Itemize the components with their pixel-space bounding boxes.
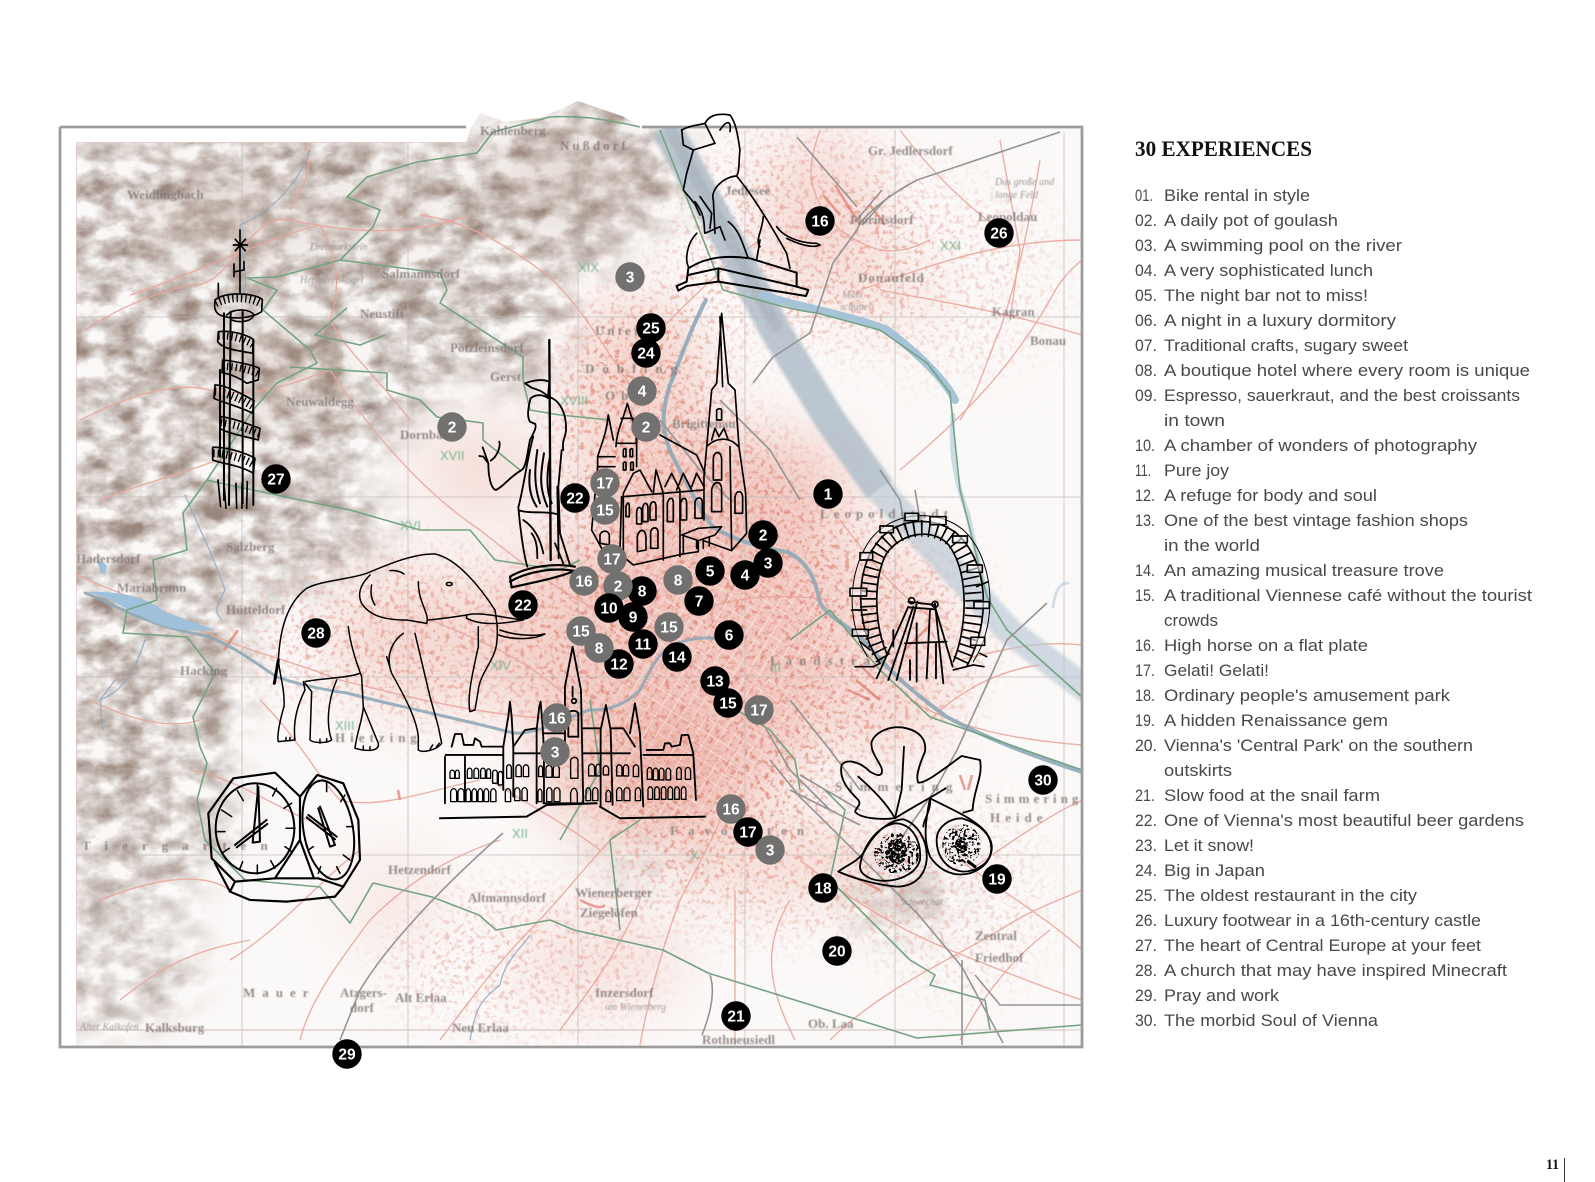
illustration: Rathaus city hall bbox=[440, 647, 705, 818]
map place names: Gerst bbox=[490, 369, 522, 384]
marker 2 grey west: 2 bbox=[448, 420, 456, 436]
marker 22 south: 22 bbox=[514, 598, 532, 614]
map place names: XVI bbox=[400, 518, 421, 533]
map place names: Bonau bbox=[1030, 333, 1066, 348]
item 3: A swimming pool on the river bbox=[1164, 237, 1403, 255]
illustration: elephant bbox=[274, 554, 545, 751]
marker 30 bbox=[1028, 765, 1058, 795]
marker 17 grey: 17 bbox=[596, 476, 614, 492]
marker 16 grey centre: 16 bbox=[575, 574, 593, 590]
marker 17 grey bbox=[590, 468, 620, 498]
item 30: The morbid Soul of Vienna bbox=[1164, 1012, 1379, 1030]
marker 16 grey city hall: 16 bbox=[548, 710, 566, 728]
marker 3 grey south: 3 bbox=[766, 842, 775, 860]
map place names: Dornbach bbox=[400, 427, 456, 442]
item 28: 28. bbox=[1135, 962, 1157, 980]
map place names: Weidlingbach bbox=[127, 187, 204, 202]
marker 8 grey south bbox=[584, 633, 614, 663]
illustration: Riesenrad ferris wheel bbox=[850, 513, 990, 683]
Danube bbox=[665, 126, 880, 490]
marker 26: 26 bbox=[990, 226, 1008, 242]
marker 3 grey city hall bbox=[540, 737, 570, 767]
map place names: Das große und bbox=[994, 177, 1055, 188]
map place names: Hütteldorf bbox=[226, 602, 286, 617]
item 23: Let it snow! bbox=[1164, 837, 1254, 855]
map place names: Salzberg bbox=[226, 539, 275, 554]
marker 16 grey south: 16 bbox=[722, 802, 740, 818]
tributary streams bbox=[100, 150, 530, 1040]
map place names: Floridsdorf bbox=[850, 212, 914, 227]
map place names: lange Feld bbox=[995, 190, 1039, 201]
marker 20: 20 bbox=[828, 944, 846, 960]
item 23 bbox=[1135, 837, 1254, 855]
map place names: Hietzing bbox=[335, 730, 422, 745]
marker 16 grey city hall bbox=[542, 703, 572, 733]
marker 6 bbox=[714, 620, 744, 650]
marker 17 grey east: 17 bbox=[750, 702, 768, 720]
marker 8 grey: 8 bbox=[674, 572, 683, 590]
item 22: One of Vienna's most beautiful beer gardens bbox=[1164, 812, 1524, 830]
map place names: Alter Kalkofen bbox=[79, 1022, 139, 1033]
item 4: A very sophisticated lunch bbox=[1164, 262, 1373, 280]
map place names: Heide bbox=[990, 810, 1048, 825]
item 18: 18. bbox=[1135, 687, 1155, 705]
item 7: 07. bbox=[1135, 337, 1157, 355]
item 24: Big in Japan bbox=[1164, 862, 1265, 880]
marker 16 north bbox=[805, 206, 835, 236]
item 15: A traditional Viennese café without the tourist bbox=[1164, 587, 1533, 605]
marker 2 grey west bbox=[437, 412, 467, 442]
map place names: XII bbox=[512, 826, 528, 841]
marker 24 bbox=[631, 338, 661, 368]
map frame bbox=[60, 127, 1082, 1047]
map place names: Jedlesee bbox=[725, 183, 771, 198]
map place names: X bbox=[690, 848, 699, 863]
item 1: 01. bbox=[1135, 187, 1153, 205]
map place names: XXI bbox=[940, 238, 961, 253]
marker 25: 25 bbox=[642, 320, 660, 338]
marker 15 grey east: 15 bbox=[660, 620, 678, 636]
item 2: A daily pot of goulash bbox=[1164, 212, 1338, 230]
illustration: lion statue bbox=[677, 114, 820, 296]
marker 2 grey centre: 2 bbox=[614, 578, 622, 596]
map place names: Leopoldstadt bbox=[820, 506, 953, 521]
marker 13: 13 bbox=[706, 674, 724, 690]
marker 28: 28 bbox=[307, 626, 325, 642]
illustration: cathedral bbox=[592, 313, 747, 565]
item 12: 12. bbox=[1135, 487, 1155, 505]
marker 3 bbox=[753, 548, 783, 578]
item 5: The night bar not to miss! bbox=[1164, 287, 1368, 305]
map place names: Pötzleinsdorf bbox=[450, 340, 524, 355]
item 20: Vienna's 'Central Park' on the southern bbox=[1164, 737, 1473, 755]
item 15: crowds bbox=[1164, 612, 1218, 630]
marker 5: 5 bbox=[706, 564, 715, 580]
marker 26 bbox=[984, 218, 1014, 248]
marker 3: 3 bbox=[764, 556, 773, 572]
map place names: Kalksburg bbox=[145, 1020, 205, 1035]
item 11: 11. bbox=[1135, 462, 1151, 480]
marker 29: 29 bbox=[338, 1046, 356, 1064]
marker 13 bbox=[700, 666, 730, 696]
marker 17 grey east bbox=[744, 695, 774, 725]
marker 14: 14 bbox=[668, 650, 686, 666]
marker 27: 27 bbox=[267, 472, 285, 488]
marker 22: 22 bbox=[566, 490, 584, 508]
marker 2: 2 bbox=[759, 528, 767, 544]
map place names: Atzgers- bbox=[340, 985, 387, 1000]
map place names: Mühl bbox=[841, 290, 863, 301]
marker 15 bbox=[713, 688, 743, 718]
blue river patch bbox=[85, 560, 215, 631]
map place names: Wienerberger bbox=[575, 885, 653, 900]
marker 15 grey west bbox=[566, 616, 596, 646]
marker 15 grey west: 15 bbox=[572, 624, 590, 640]
old Danube and branches bbox=[762, 295, 1068, 607]
marker 4 bbox=[730, 560, 760, 590]
map place names: Schwechat bbox=[900, 897, 943, 908]
map place names: III bbox=[770, 660, 781, 675]
marker 19 bbox=[982, 864, 1012, 894]
urban pink wash bbox=[330, 135, 955, 1010]
marker 2 grey: 2 bbox=[642, 420, 650, 436]
marker 5 bbox=[695, 556, 725, 586]
map place names: Ob. Laa bbox=[808, 1016, 854, 1031]
item 9: in town bbox=[1164, 412, 1225, 430]
marker 11 bbox=[628, 629, 658, 659]
marker 15 grey east bbox=[654, 612, 684, 642]
map markers bbox=[261, 206, 1058, 1069]
map place names: Nußdorf bbox=[560, 138, 629, 153]
map place names: XIII bbox=[335, 718, 355, 733]
marker 17 grey centre: 17 bbox=[603, 552, 621, 568]
marker 17 south: 17 bbox=[739, 824, 757, 842]
graticule bbox=[76, 130, 1082, 1047]
item 21: Slow food at the snail farm bbox=[1164, 787, 1380, 805]
map place names: Mariabrunn bbox=[117, 580, 187, 595]
item 27: 27. bbox=[1135, 937, 1157, 955]
item 19: A hidden Renaissance gem bbox=[1164, 712, 1388, 730]
map place names: Favoriten bbox=[670, 823, 814, 838]
map place names: Hermannskogel bbox=[299, 275, 364, 286]
illustration: observation tower bbox=[213, 230, 262, 508]
item 14: An amazing musical treasure trove bbox=[1164, 562, 1444, 580]
map place names: Mauer bbox=[243, 985, 316, 1000]
marker 7: 7 bbox=[695, 594, 703, 610]
map place names: Simmering bbox=[835, 779, 959, 794]
map place names: Neustift bbox=[360, 306, 405, 321]
item 11 bbox=[1135, 462, 1230, 480]
marker 4 grey bbox=[627, 376, 657, 406]
marker 18: 18 bbox=[814, 880, 832, 898]
map place names: Donaufeld bbox=[858, 270, 925, 285]
marker 9: 9 bbox=[629, 610, 638, 626]
marker 8 grey bbox=[663, 565, 693, 595]
marker 1 bbox=[813, 479, 843, 509]
map place names: XIV bbox=[490, 658, 511, 673]
marker 8: 8 bbox=[638, 584, 647, 600]
marker 21 bbox=[721, 1001, 751, 1031]
map place names: Altmannsdorf bbox=[468, 890, 547, 905]
item 1: Bike rental in style bbox=[1164, 187, 1310, 205]
marker 25 bbox=[636, 313, 666, 343]
item 9 bbox=[1135, 387, 1520, 430]
marker 7 bbox=[684, 586, 714, 616]
map place names: XIX bbox=[578, 260, 599, 275]
item 13: 13. bbox=[1135, 512, 1155, 530]
map place names: Zentral bbox=[975, 928, 1017, 943]
map place names: Unter bbox=[595, 323, 642, 338]
illustration: double-face clock bbox=[208, 773, 361, 902]
marker 10 bbox=[594, 593, 624, 623]
item 21: 21. bbox=[1135, 787, 1155, 805]
marker 3 grey: 3 bbox=[626, 270, 635, 286]
map place names: Döbling bbox=[585, 361, 685, 376]
marker 22 south bbox=[508, 590, 538, 620]
marker 17 south bbox=[733, 817, 763, 847]
Danube canal and Wien river bbox=[85, 300, 1082, 772]
illustration: figs bbox=[838, 727, 992, 887]
marker 15 grey bbox=[590, 495, 620, 525]
map neat line bbox=[76, 142, 1066, 1030]
item 8: 08. bbox=[1135, 362, 1157, 380]
item 7: Traditional crafts, sugary sweet bbox=[1164, 337, 1409, 355]
dark ridge tones bbox=[140, 125, 640, 430]
marker 11: 11 bbox=[635, 636, 652, 654]
marker 16 north: 16 bbox=[811, 214, 829, 230]
item 15: 15. bbox=[1135, 587, 1155, 605]
urban grain bbox=[230, 130, 1060, 1030]
marker 16 grey centre bbox=[569, 566, 599, 596]
item 26: Luxury footwear in a 16th-century castle bbox=[1164, 912, 1481, 930]
item 6: 06. bbox=[1135, 312, 1157, 330]
marker 28 bbox=[301, 618, 331, 648]
map place names: Dreimarkstein bbox=[309, 242, 367, 253]
item 25: 25. bbox=[1135, 887, 1157, 905]
marker 18 bbox=[808, 873, 838, 903]
map panel bbox=[0, 90, 1102, 1047]
marker 1: 1 bbox=[824, 486, 833, 504]
marker 19: 19 bbox=[988, 872, 1006, 888]
map place names: Hacking bbox=[180, 663, 227, 678]
item 10: A chamber of wonders of photography bbox=[1164, 437, 1478, 455]
map place names: Salmannsdorf bbox=[382, 266, 461, 281]
map place names: Brigittenau bbox=[672, 416, 736, 431]
item 2: 02. bbox=[1135, 212, 1157, 230]
illustration: Pallas Athene statue bbox=[479, 340, 575, 587]
marker 20 bbox=[822, 936, 852, 966]
item 5: 05. bbox=[1135, 287, 1157, 305]
map place names: am Wienerberg bbox=[605, 1002, 666, 1013]
marker 16 grey south bbox=[716, 794, 746, 824]
map place names: Simmeringer bbox=[985, 791, 1102, 806]
map place names: Alt Erlaa bbox=[395, 990, 447, 1005]
map place names: Friedhof bbox=[975, 950, 1024, 965]
item 18: Ordinary people's amusement park bbox=[1164, 687, 1451, 705]
map place names: Kagran bbox=[992, 304, 1035, 319]
item 30: 30. bbox=[1135, 1012, 1157, 1030]
item 23: 23. bbox=[1135, 837, 1157, 855]
item 9: 09. bbox=[1135, 387, 1157, 405]
marker 8 bbox=[627, 576, 657, 606]
marker 4 grey: 4 bbox=[638, 384, 647, 400]
map place names: Hetzendorf bbox=[388, 862, 451, 877]
pink roads bbox=[60, 130, 1082, 1045]
map place names: Neuwaldegg bbox=[286, 394, 354, 409]
marker 2 grey bbox=[631, 412, 661, 442]
marker 30: 30 bbox=[1034, 772, 1052, 790]
item 24 bbox=[1135, 862, 1265, 880]
item 17: Gelati! Gelati! bbox=[1164, 662, 1269, 680]
marker 14 bbox=[662, 642, 692, 672]
map place names: Gr. Jedlersdorf bbox=[868, 143, 953, 158]
item 22: 22. bbox=[1135, 812, 1157, 830]
item 20: outskirts bbox=[1164, 762, 1232, 780]
map place names: Kahlenberg bbox=[480, 123, 546, 138]
item 28: A church that may have inspired Minecraft bbox=[1164, 962, 1508, 980]
deep red city core bbox=[622, 722, 705, 816]
item 15 bbox=[1135, 587, 1533, 630]
item 10: 10. bbox=[1135, 437, 1155, 455]
map place names: Leopoldau bbox=[978, 209, 1037, 224]
marker 24: 24 bbox=[637, 346, 655, 362]
marker 27 bbox=[261, 464, 291, 494]
marker 6: 6 bbox=[725, 628, 734, 644]
map place names: schüttel bbox=[840, 302, 871, 313]
item 20: 20. bbox=[1135, 737, 1157, 755]
item 12: A refuge for body and soul bbox=[1164, 487, 1377, 505]
item 8: A boutique hotel where every room is unique bbox=[1164, 362, 1530, 380]
marker 2 grey centre bbox=[603, 571, 633, 601]
railways bbox=[340, 132, 1082, 1045]
marker 8 grey south: 8 bbox=[595, 640, 604, 658]
marker 22 bbox=[560, 483, 590, 513]
street grid bbox=[548, 311, 962, 873]
map place names: Landstraße bbox=[770, 653, 904, 668]
item 17: 17. bbox=[1135, 662, 1155, 680]
item 4: 04. bbox=[1135, 262, 1157, 280]
item 24: 24. bbox=[1135, 862, 1157, 880]
item 14: 14. bbox=[1135, 562, 1155, 580]
item 13: in the world bbox=[1164, 537, 1260, 555]
marker 3 grey south bbox=[755, 835, 785, 865]
map place names: Tiergarten bbox=[82, 838, 282, 853]
marker 3 grey city hall: 3 bbox=[551, 744, 560, 762]
item 9: Espresso, sauerkraut, and the best croissants bbox=[1164, 387, 1520, 405]
map place names: XVII bbox=[440, 448, 465, 463]
item 3: 03. bbox=[1135, 237, 1157, 255]
marker 21: 21 bbox=[727, 1008, 745, 1026]
item 13 bbox=[1135, 512, 1468, 555]
district boundaries bbox=[123, 117, 1082, 1038]
map place names: Rothneusiedl bbox=[702, 1032, 775, 1047]
map place names: Hadersdorf bbox=[76, 551, 141, 566]
marker 29 bbox=[332, 1039, 362, 1069]
item 29: Pray and work bbox=[1164, 987, 1280, 1005]
item 26: 26. bbox=[1135, 912, 1157, 930]
heading: 30 experiences: 30 EXPERIENCES bbox=[1135, 136, 1312, 161]
marker 12 bbox=[604, 649, 634, 679]
marker 9 bbox=[618, 602, 648, 632]
marker 12: 12 bbox=[610, 656, 628, 674]
marker 10: 10 bbox=[600, 600, 618, 618]
dark red street clusters bbox=[224, 185, 972, 907]
item 6: A night in a luxury dormitory bbox=[1164, 312, 1397, 330]
page number: 11 bbox=[1546, 1157, 1559, 1173]
item 16: 16. bbox=[1135, 637, 1155, 655]
marker 2 bbox=[748, 520, 778, 550]
item 25: The oldest restaurant in the city bbox=[1164, 887, 1418, 905]
marker 17 grey centre bbox=[597, 544, 627, 574]
map place names: Inzersdorf bbox=[595, 985, 654, 1000]
map place names: Ziegelöfen bbox=[580, 905, 639, 920]
item 13: One of the best vintage fashion shops bbox=[1164, 512, 1468, 530]
item 19: 19. bbox=[1135, 712, 1155, 730]
item 27: The heart of Central Europe at your feet bbox=[1164, 937, 1482, 955]
item 16: High horse on a flat plate bbox=[1164, 637, 1368, 655]
map place names bbox=[76, 123, 1102, 1047]
map paper bbox=[76, 101, 1082, 1047]
map place names: XVIII bbox=[560, 393, 588, 408]
marker 4: 4 bbox=[741, 568, 750, 584]
item 11: Pure joy bbox=[1164, 462, 1230, 480]
marker 15: 15 bbox=[719, 696, 737, 712]
map place names: Ober bbox=[605, 388, 658, 403]
terrain shading bbox=[0, 90, 960, 1030]
map place names: Neu Erlaa bbox=[452, 1020, 509, 1035]
marker 3 grey bbox=[615, 262, 645, 292]
map place names: dorf bbox=[350, 1000, 374, 1015]
item 29: 29. bbox=[1135, 987, 1157, 1005]
experience list bbox=[1135, 187, 1533, 1030]
item 20 bbox=[1135, 737, 1473, 780]
page number bbox=[1546, 1157, 1564, 1182]
marker 15 grey: 15 bbox=[596, 502, 614, 520]
